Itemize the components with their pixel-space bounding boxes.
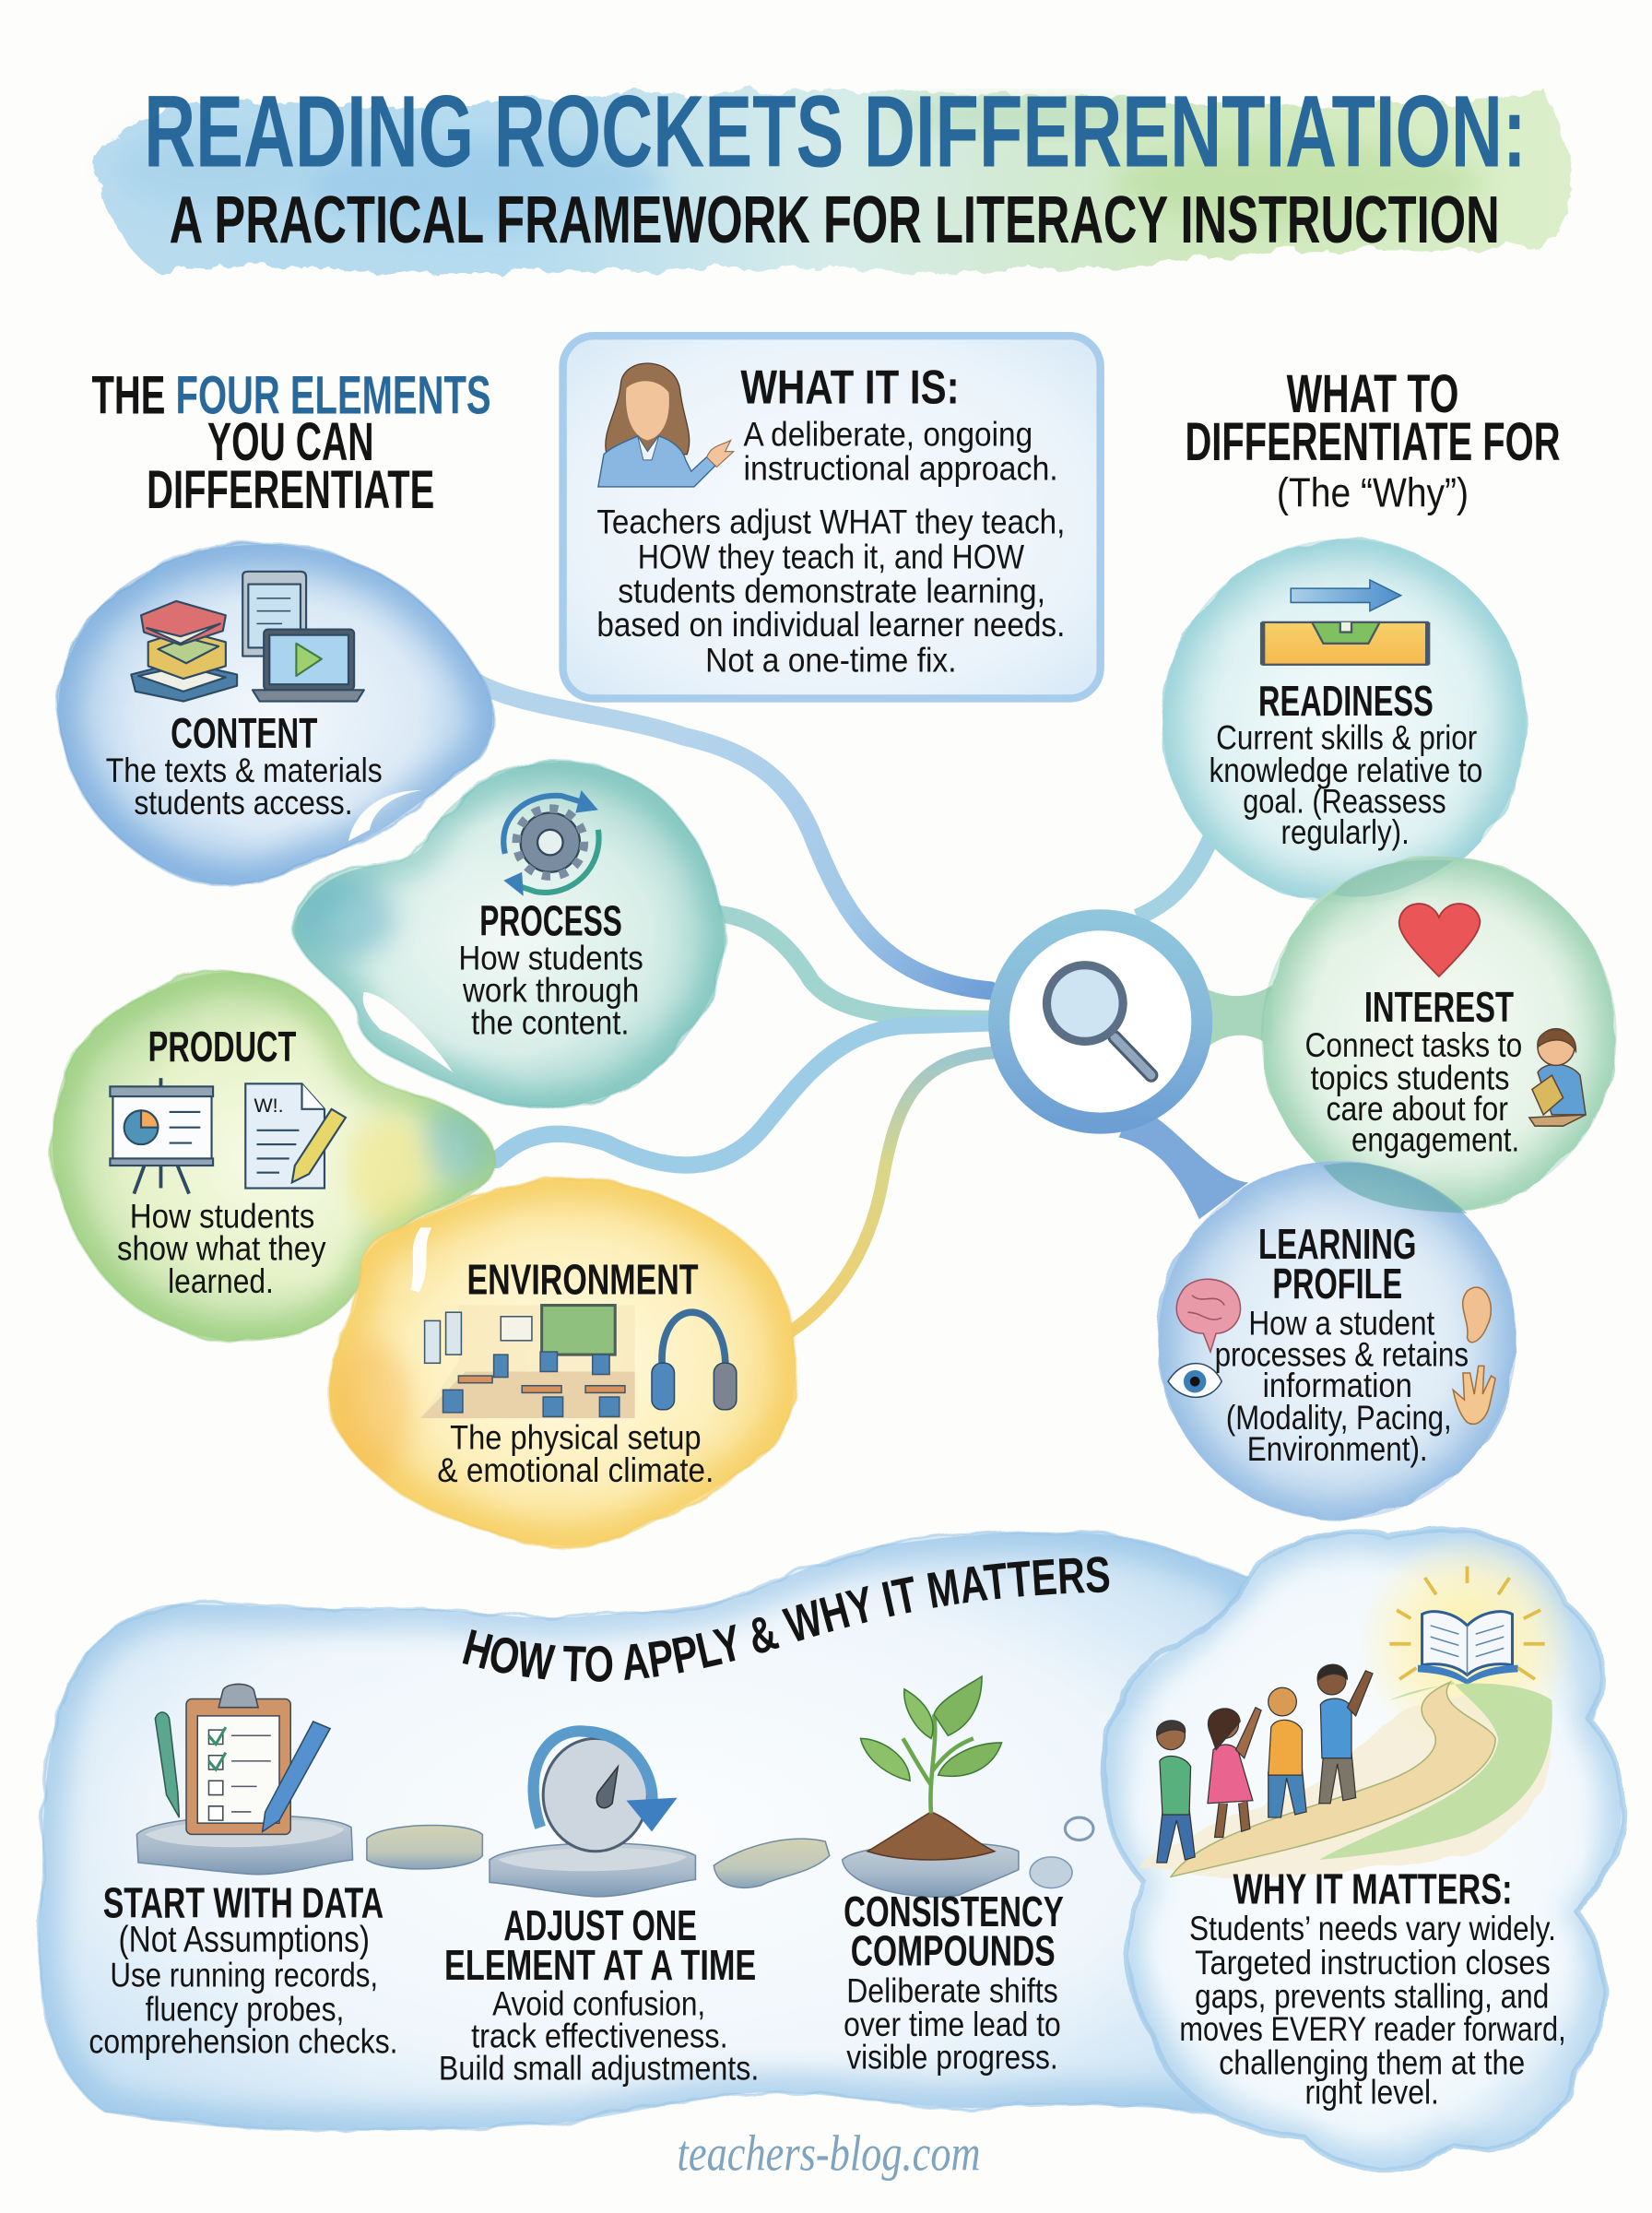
icon: boy reading [1529,1029,1586,1126]
short description: A deliberate, ongoing [743,416,1032,454]
icon: soil [867,1812,995,1860]
icon: gear with arrows [503,790,599,896]
icon: classroom [420,1306,635,1418]
icon: brain [1176,1279,1241,1352]
learning profile description: How a student [1248,1305,1434,1343]
heading: the four elements: YOU CAN [207,412,374,472]
content description: The texts & materials [106,751,383,789]
body text: based on individual learner needs. [596,606,1065,644]
process description: work through [462,972,639,1010]
step 2 text [439,1901,759,2088]
body text: Not a one-time fix. [705,641,957,679]
step 2 text: ELEMENT AT A TIME [444,1941,756,1989]
learning profile label [1258,1220,1416,1308]
icon: gauge [543,1738,647,1852]
icon: blue pen [263,1722,330,1831]
step 1 text: fluency probes, [146,1990,344,2028]
icon: seedling [860,1676,1002,1813]
stone 2 with gauge [490,1731,695,1897]
readiness description: knowledge relative to [1209,751,1482,789]
crack in wash [363,992,453,1072]
why it matters body: Targeted instruction closes [1195,1944,1551,1982]
step 1 text: Use running records, [110,1957,378,1994]
step 3 text: Deliberate shifts [846,1972,1058,2010]
product description: show what they [117,1230,326,1268]
process description: the content. [471,1004,630,1042]
short description [743,416,1058,487]
blob: product [53,972,495,1342]
icon: rotating arrow [534,1731,652,1828]
illustration: four students [1157,1664,1373,1863]
band colour wash [112,99,1481,229]
content description: students access. [134,784,353,822]
why it matters body: challenging them at the [1219,2044,1525,2082]
icon: green pen [155,1712,179,1817]
ring [998,920,1202,1123]
heading: the four elements [91,365,491,520]
step 1 text [88,1879,398,2061]
interest description: Connect tasks to [1305,1026,1522,1064]
crack in wash [410,1227,431,1293]
circle: learning profile [1158,860,1516,1520]
readiness description: regularly). [1281,813,1410,851]
content description [106,751,383,822]
small stone 1 [367,1825,482,1869]
learning profile description: information [1263,1367,1412,1404]
product label: PRODUCT [148,1023,296,1071]
step 2 text: ADJUST ONE [503,1901,697,1949]
connector: process [713,913,990,1019]
icon: heart [1399,904,1480,976]
product description: learned. [168,1262,274,1300]
env description: & emotional climate. [437,1451,714,1489]
circle: readiness [1162,539,1527,903]
blob: process [294,763,724,1108]
icon: ear [1463,1287,1491,1343]
watercolor band [96,90,1573,273]
blob: environment [327,1178,796,1545]
readiness description: Current skills & prior [1216,719,1477,757]
heading: what to differentiate for: (The “Why”) [1277,470,1469,515]
icon: eye [1168,1364,1221,1397]
why it matters body [1179,1910,1566,2112]
product description: How students [130,1197,314,1235]
icon: presentation easel [110,1078,213,1194]
heading: what to differentiate for [1185,364,1561,515]
step 3 text: COMPOUNDS [851,1927,1056,1975]
step 1 text: comprehension checks. [88,2023,398,2061]
connectors: elements to hub [473,680,993,1333]
stone 1 with clipboard [136,1684,353,1875]
small stone 2 [714,1839,830,1888]
interest label: INTEREST [1364,983,1514,1031]
process label: PROCESS [479,897,622,945]
icon: book with glow [1357,1533,1577,1754]
step 2 text: Build small adjustments. [439,2050,759,2088]
interest description: engagement. [1351,1121,1519,1159]
step 3 text: CONSISTENCY [844,1888,1064,1935]
learning profile description: (Modality, Pacing, [1226,1399,1452,1437]
readiness label: READINESS [1258,677,1434,725]
body text: students demonstrate learning, [618,572,1045,609]
learning profile description: processes & retains [1215,1335,1469,1373]
panel: what it is [563,336,1101,699]
interest description [1305,1026,1522,1159]
icon: magnifying glass [1046,965,1151,1075]
env label: ENVIRONMENT [467,1255,699,1303]
heading: what to differentiate for: WHAT TO [1287,364,1458,424]
icon: teacher [598,363,734,487]
body text: Teachers adjust WHAT they teach, [596,503,1065,540]
learning profile label: LEARNING [1258,1220,1416,1268]
step 3 text: visible progress. [846,2038,1058,2076]
interest description: care about for [1326,1090,1508,1128]
heading: the four elements: THE FOUR ELEMENTS [91,365,491,425]
hub: magnifier [998,920,1202,1123]
icon: clipboard [186,1684,290,1834]
connector: content [473,680,990,990]
heading: the four elements: DIFFERENTIATE [147,460,434,520]
circle: interest [1261,857,1617,1213]
box [563,336,1101,699]
crack in wash [348,790,422,841]
interest description: topics students [1311,1059,1509,1096]
learning profile description: Environment). [1247,1430,1428,1468]
icon: document and pencil [245,1083,346,1189]
icon: document and pencil: W!. [254,1095,284,1117]
env description: The physical setup [450,1419,702,1457]
step 1 text: START WITH DATA [103,1879,384,1927]
icon: arrow [1291,580,1401,611]
learning profile description [1215,1305,1469,1468]
thought bubbles [1030,1817,1093,1888]
why it matters body: moves EVERY reader forward, [1179,2010,1566,2048]
learning profile label: PROFILE [1272,1260,1402,1308]
icon: books and devices [131,572,364,702]
curved heading: HOW TO APPLY & WHY IT MATTERS [463,1556,1110,1682]
content label: CONTENT [171,709,317,757]
connectors: hub to reasons [1119,833,1272,1219]
panel: why it matters [1101,1529,1622,2168]
connector: environment [787,1053,993,1333]
process description [458,939,643,1042]
title banner [96,76,1573,273]
step 3 text [844,1888,1064,2076]
why it matters body: right level. [1305,2074,1439,2112]
step 2 text: track effectiveness. [471,2017,728,2054]
icon: hand [1453,1366,1495,1424]
panel: how to apply [39,1533,1269,2130]
env description [437,1419,714,1489]
why it matters body: Students’ needs vary widely. [1189,1910,1556,1947]
step 1 text: (Not Assumptions) [119,1919,370,1959]
short description: instructional approach. [743,449,1058,487]
what it is heading: WHAT IT IS: [740,361,960,415]
overlap interest-learning [1323,1163,1468,1213]
body text: HOW they teach it, and HOW [638,538,1024,576]
body text [596,503,1065,679]
why it matters heading: WHY IT MATTERS: [1233,1864,1512,1912]
connector: product [497,1023,990,1166]
illustration: path on green hill [1139,1682,1552,1876]
footer: site name: teachers-blog.com [678,2125,981,2182]
step 2 text: Avoid confusion, [492,1984,705,2022]
step 3 text: over time lead to [844,2006,1061,2043]
stone 3 with plant [843,1676,1019,1897]
blob: content [58,545,492,884]
readiness description [1209,719,1482,851]
why it matters body: gaps, prevents stalling, and [1195,1978,1549,2016]
icon: headphones [652,1312,737,1410]
process description: How students [458,939,643,976]
overlap readiness-interest [1333,860,1453,897]
readiness description: goal. (Reassess [1243,782,1446,820]
icon: spirit level [1263,622,1428,665]
product description [117,1197,326,1300]
